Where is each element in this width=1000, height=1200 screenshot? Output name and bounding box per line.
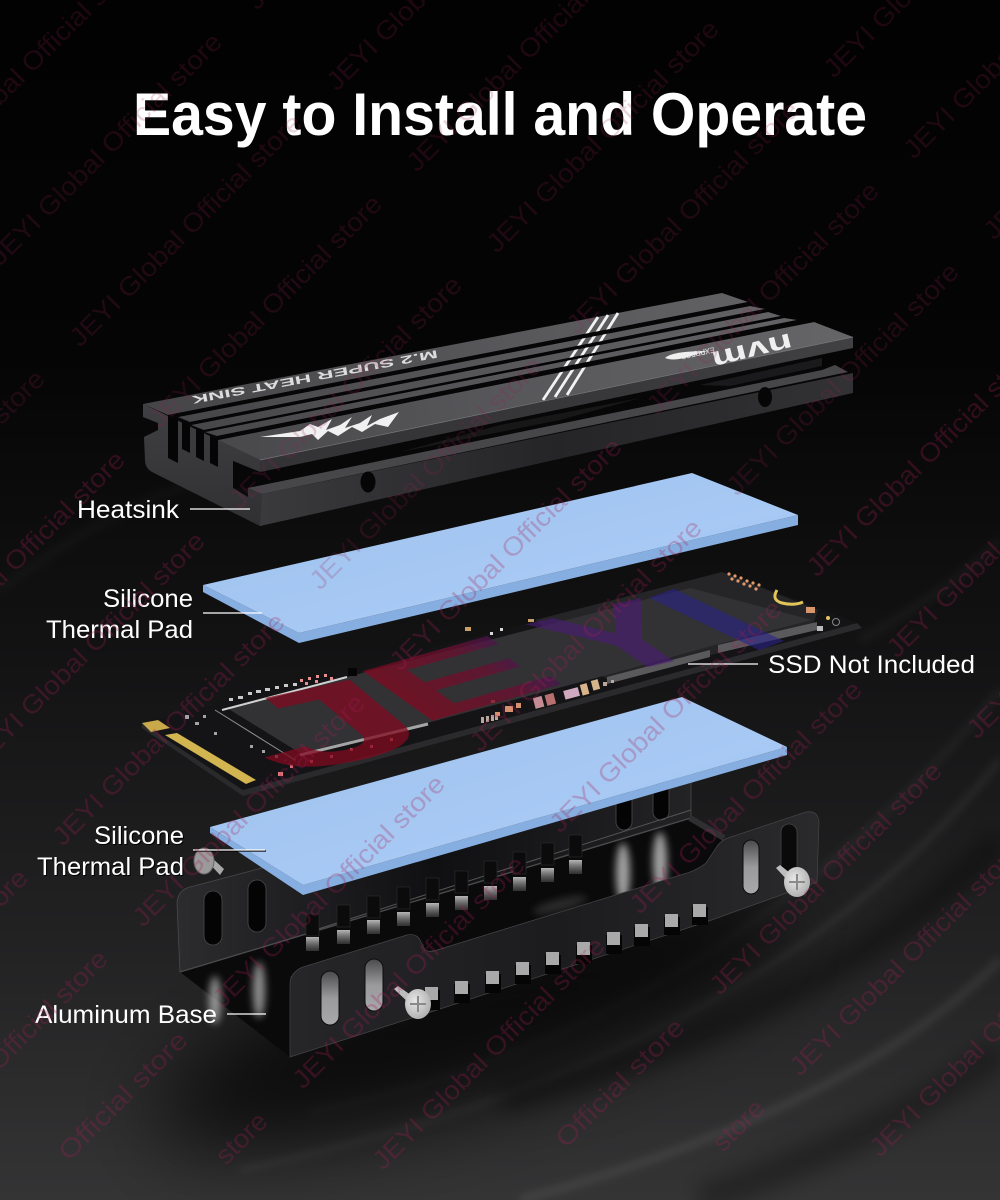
logo: nvm express <box>665 327 796 376</box>
watermark: JEYI Global Official store <box>63 108 308 352</box>
lightning logo <box>260 412 399 440</box>
floor reflections <box>209 832 667 1024</box>
front wall slots <box>321 840 759 1025</box>
screw: front left <box>394 986 431 1019</box>
label: Silicone Thermal Pad upper: Thermal Pad <box>46 616 193 644</box>
rear plate <box>143 293 748 415</box>
back wall louvre line <box>312 810 691 931</box>
watermark: JEYI Global Official store <box>383 432 628 676</box>
front wall <box>290 812 819 1057</box>
watermark: JEYI Global Official store <box>46 607 291 851</box>
label: Silicone Thermal Pad lower <box>37 822 265 881</box>
fin slots on end face <box>168 415 218 467</box>
label: Silicone Thermal Pad lower: Thermal Pad <box>37 853 184 881</box>
connector contacts <box>142 720 256 784</box>
components <box>185 572 840 776</box>
back wall slots <box>204 772 669 945</box>
watermark: JEYI Global Official store <box>640 176 885 420</box>
label: SSD Not Included: SSD Not Included <box>768 651 975 679</box>
watermark: JEYI Global Official store <box>703 756 948 1000</box>
silver edges <box>215 677 428 760</box>
watermark: JEYI Global Official store <box>463 513 708 757</box>
mounting holes <box>360 387 772 492</box>
aluminum base bracket <box>177 755 819 1057</box>
watermark: JEYI Global Official store <box>126 688 371 932</box>
watermark: JEYI Global Official store <box>366 931 611 1175</box>
JEYI logo overlay: Y <box>498 581 746 694</box>
JEYI logo overlay <box>179 569 830 796</box>
NAND pins <box>607 622 817 684</box>
JEYI logo overlay: E <box>326 617 592 741</box>
screw: back <box>194 848 224 875</box>
logo: nvm express: nvm <box>709 327 796 376</box>
recess under top plate <box>233 348 853 488</box>
fold highlight <box>180 818 691 972</box>
label: Heatsink: Heatsink <box>77 496 180 524</box>
label: Silicone Thermal Pad upper: Silicone <box>103 585 193 613</box>
logo: nvm express: EXPRESS <box>680 345 715 361</box>
watermark: JEYI Global Official store <box>480 14 725 258</box>
watermark: Official store <box>52 1025 193 1166</box>
heatsink end face <box>143 404 262 526</box>
front plate <box>218 322 853 460</box>
watermark: JEYI Global Official store <box>560 95 805 339</box>
watermark: store <box>706 1093 770 1157</box>
JEYI logo overlay: I <box>604 569 830 671</box>
watermark: JEYI Global Official store <box>286 850 531 1094</box>
JEYI logo overlay: J <box>179 655 472 796</box>
watermark: store <box>209 1106 273 1170</box>
rail front face <box>260 373 853 526</box>
memory area <box>535 572 818 682</box>
rail top <box>248 365 848 494</box>
watermark: Official store <box>549 1012 690 1153</box>
SSD <box>142 569 862 796</box>
front plate edge <box>260 337 853 472</box>
upper silicone thermal pad <box>203 473 798 643</box>
label: Aluminum Base: Aluminum Base <box>35 1001 217 1029</box>
watermark: JEYI Global Official store <box>303 351 548 595</box>
PCB <box>142 623 862 796</box>
title: Easy to Install and Operate <box>133 81 867 148</box>
white stripes <box>543 313 618 400</box>
watermark: JEYI Global Official store <box>223 270 468 514</box>
watermark: JEYI Global Official store <box>720 257 965 501</box>
sticker <box>227 588 812 753</box>
heatsink <box>143 293 853 526</box>
label: Silicone Thermal Pad upper <box>46 585 262 644</box>
floor <box>180 818 724 1057</box>
product text: M.2 SUPER HEAT SINK: M.2 SUPER HEAT SINK <box>191 347 439 405</box>
back wall <box>177 755 691 972</box>
back wall dark tabs <box>306 835 582 936</box>
cooling fins <box>178 306 797 436</box>
watermark: JEYI Global Official store <box>543 594 788 838</box>
back wall light tabs <box>306 860 582 951</box>
watermark: JEYI Global Official store <box>143 189 388 433</box>
watermark: JEYI Global Official store <box>206 769 451 1013</box>
watermark: JEYI Global Official store <box>623 675 868 919</box>
label: Silicone Thermal Pad lower: Silicone <box>94 822 184 850</box>
front wall tabs <box>424 904 708 1010</box>
dark slots between fins <box>168 302 814 440</box>
screw: right <box>776 865 810 897</box>
lower silicone thermal pad <box>210 697 787 895</box>
